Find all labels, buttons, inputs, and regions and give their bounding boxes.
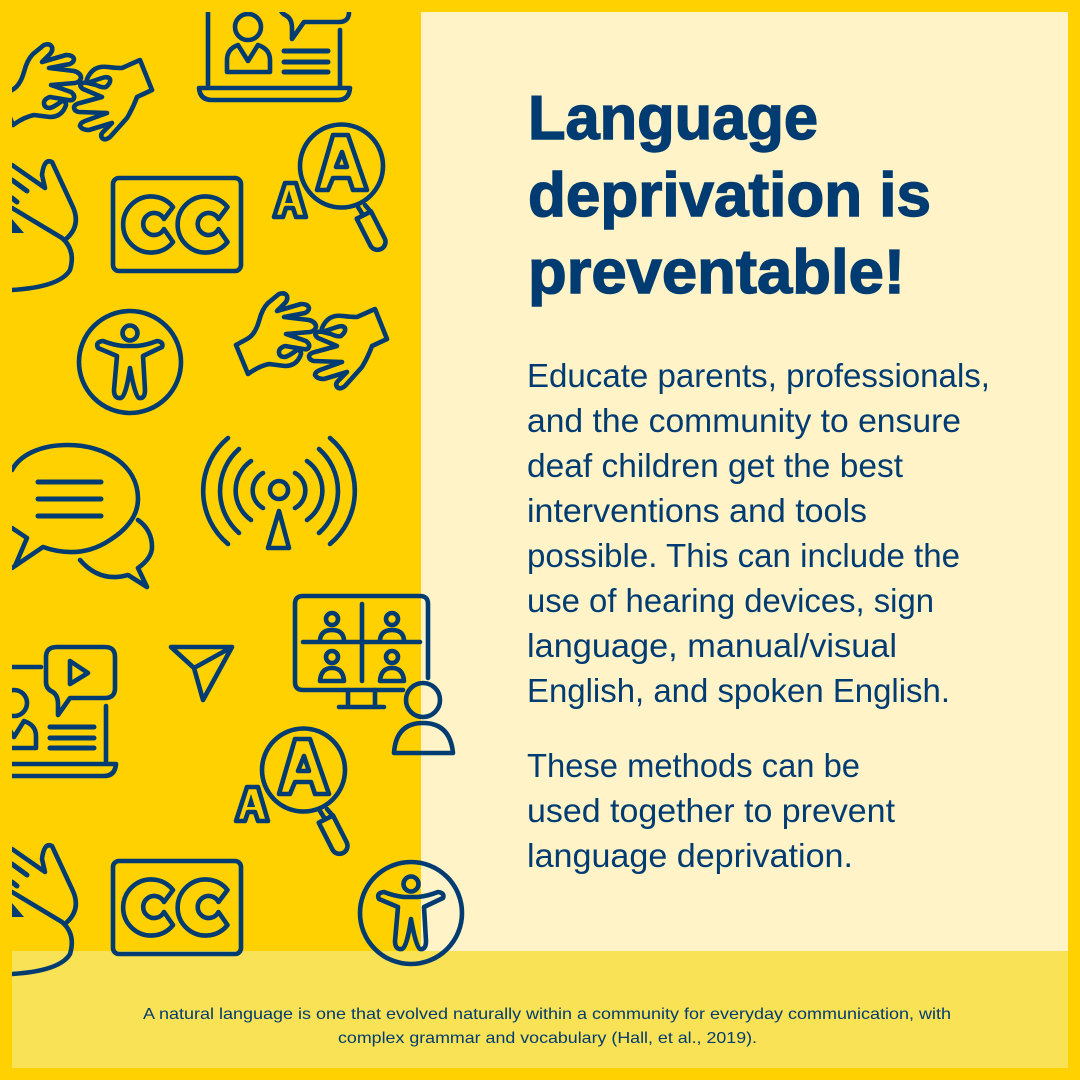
title: deprivation is <box>528 161 931 230</box>
icon: accessibility person lower <box>360 862 462 964</box>
title: preventable! <box>528 238 905 307</box>
text block: closing paragraph: These methods can be <box>527 747 860 784</box>
footnote: complex grammar and vocabulary (Hall, et al., 2019). <box>338 1030 757 1047</box>
icon pattern <box>0 0 462 974</box>
icon: person <box>394 683 453 753</box>
icon: signing hand large lower <box>12 845 76 974</box>
icon: signing hands left <box>1 44 152 139</box>
footnote <box>143 1006 951 1047</box>
text block: interventions paragraph: and the community to ensure <box>527 402 961 439</box>
icon: magnified text <box>274 124 388 253</box>
icon: laptop with presenter <box>199 0 350 100</box>
text block: interventions paragraph: language, manual/visual <box>527 627 897 664</box>
icon: signing hands right <box>236 293 387 388</box>
footnote: A natural language is one that evolved naturally within a community for everyday communication, with <box>143 1006 951 1023</box>
icon: closed captions lower <box>113 861 241 954</box>
text block: closing paragraph: language deprivation. <box>527 837 853 874</box>
icon: broadcast antenna <box>203 438 355 548</box>
icon: magnified text lower <box>236 728 350 857</box>
text block: interventions paragraph: deaf children get the best <box>527 447 903 484</box>
text block: interventions paragraph: Educate parents, professionals, <box>527 357 990 394</box>
text block: interventions paragraph: English, and spoken English. <box>527 672 950 709</box>
icon: closed captions <box>113 178 241 271</box>
icon: speech bubbles <box>12 445 152 587</box>
panel: text panel <box>421 12 1068 952</box>
title <box>528 84 931 307</box>
text block: interventions paragraph: use of hearing devices, sign <box>527 582 934 619</box>
text block: interventions paragraph: interventions and tools <box>527 492 867 529</box>
text block: interventions paragraph: possible. This can include the <box>527 537 960 574</box>
text block: closing paragraph <box>527 747 895 874</box>
icon: video call monitor <box>295 596 428 707</box>
panel: footnote band <box>12 951 1068 1068</box>
text block: interventions paragraph <box>527 357 990 709</box>
icon: laptop with video bubble <box>0 647 116 776</box>
icon: signing hand large <box>12 161 76 290</box>
text block: closing paragraph: used together to prevent <box>527 792 895 829</box>
icon: accessibility person <box>79 311 181 413</box>
icon: paper plane <box>171 647 232 700</box>
title: Language <box>528 84 818 153</box>
